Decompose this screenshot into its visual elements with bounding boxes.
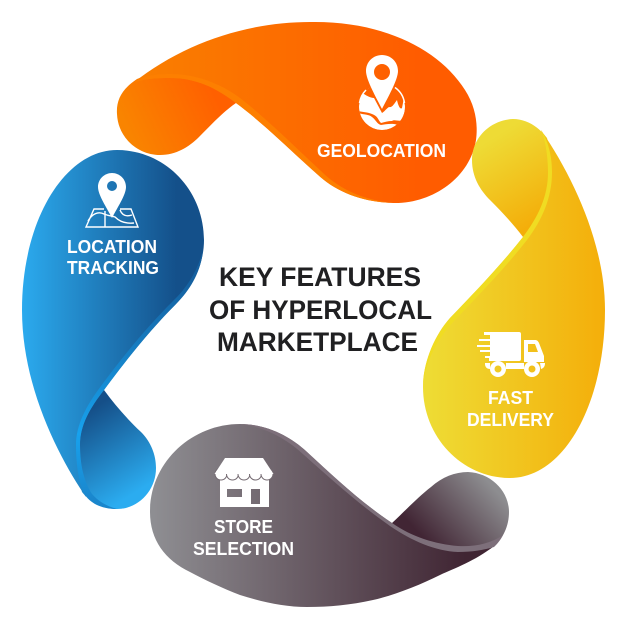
yellow ribbon edge xyxy=(423,130,552,387)
icon: storefront xyxy=(214,458,274,507)
blue ribbon edge xyxy=(76,250,203,509)
orange body xyxy=(133,22,477,203)
blue fold xyxy=(76,390,156,509)
orange fold xyxy=(117,74,236,155)
gray body xyxy=(150,424,494,607)
label: location tracking: TRACKING xyxy=(67,258,159,278)
yellow fold xyxy=(472,119,551,237)
label: fast delivery: DELIVERY xyxy=(467,410,554,430)
icon: delivery truck xyxy=(477,332,545,377)
orange ribbon edge xyxy=(133,74,393,203)
panel: store selection xyxy=(150,424,509,607)
panel: geolocation xyxy=(117,22,477,203)
icon: pin on map xyxy=(86,173,138,227)
label: geolocation: GEOLOCATION xyxy=(317,141,446,161)
gray ribbon edge xyxy=(240,424,503,552)
panel: location tracking xyxy=(22,150,204,509)
gray fold xyxy=(392,472,509,556)
label: fast delivery: FAST xyxy=(488,388,533,408)
label: store selection: SELECTION xyxy=(193,539,294,559)
title: MARKETPLACE xyxy=(217,327,418,357)
icon: globe with pin xyxy=(358,55,405,130)
title: OF HYPERLOCAL xyxy=(209,295,432,325)
label: store selection: STORE xyxy=(214,517,273,537)
label: location tracking: LOCATION xyxy=(67,237,157,257)
panel: fast delivery xyxy=(423,119,605,478)
blue body xyxy=(22,150,204,497)
yellow body xyxy=(423,130,605,478)
title: KEY FEATURES xyxy=(219,262,421,292)
